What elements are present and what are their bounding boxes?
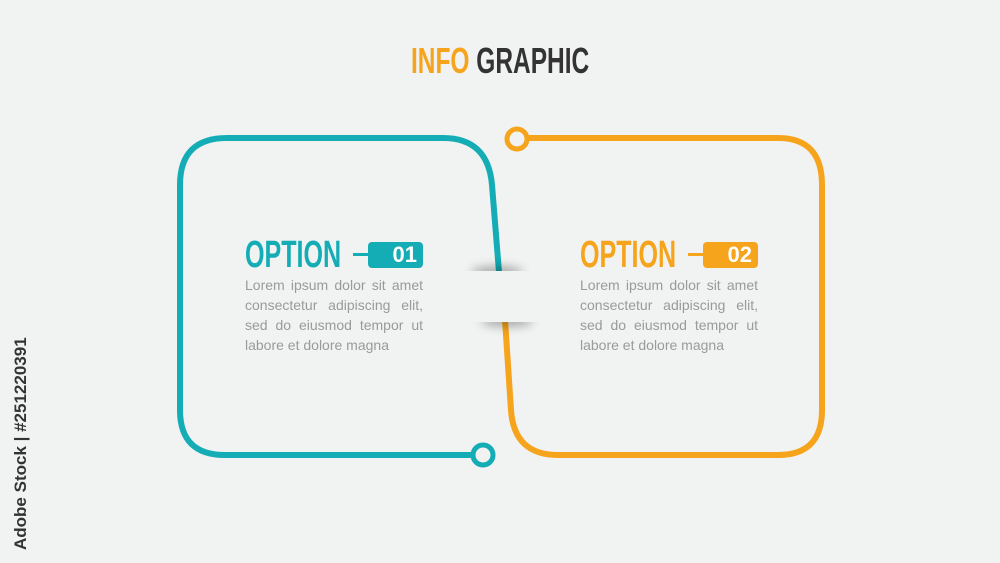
option 2 <box>580 234 758 353</box>
side watermark id: Adobe Stock | #251220391 <box>11 337 30 550</box>
option 1 <box>245 234 423 353</box>
text 2: labore et dolore magna <box>580 337 724 353</box>
orange frame <box>505 129 822 455</box>
badge 2 <box>688 242 758 268</box>
gap band shadow <box>440 267 560 326</box>
title: INFO GRAPHIC <box>411 40 589 81</box>
text 2: Lorem ipsum dolor sit amet consectetur adipiscing elit, sed do eiusmod tempor ut <box>580 277 758 333</box>
heading 1: OPTION <box>245 234 341 276</box>
badge 2: 02 <box>728 242 752 267</box>
badge 1 <box>353 242 423 268</box>
teal frame <box>180 138 499 465</box>
text 1: Lorem ipsum dolor sit amet consectetur adipiscing elit, sed do eiusmod tempor ut <box>245 277 423 333</box>
badge 1: 01 <box>393 242 417 267</box>
text 1: labore et dolore magna <box>245 337 389 353</box>
heading 2: OPTION <box>580 234 676 276</box>
